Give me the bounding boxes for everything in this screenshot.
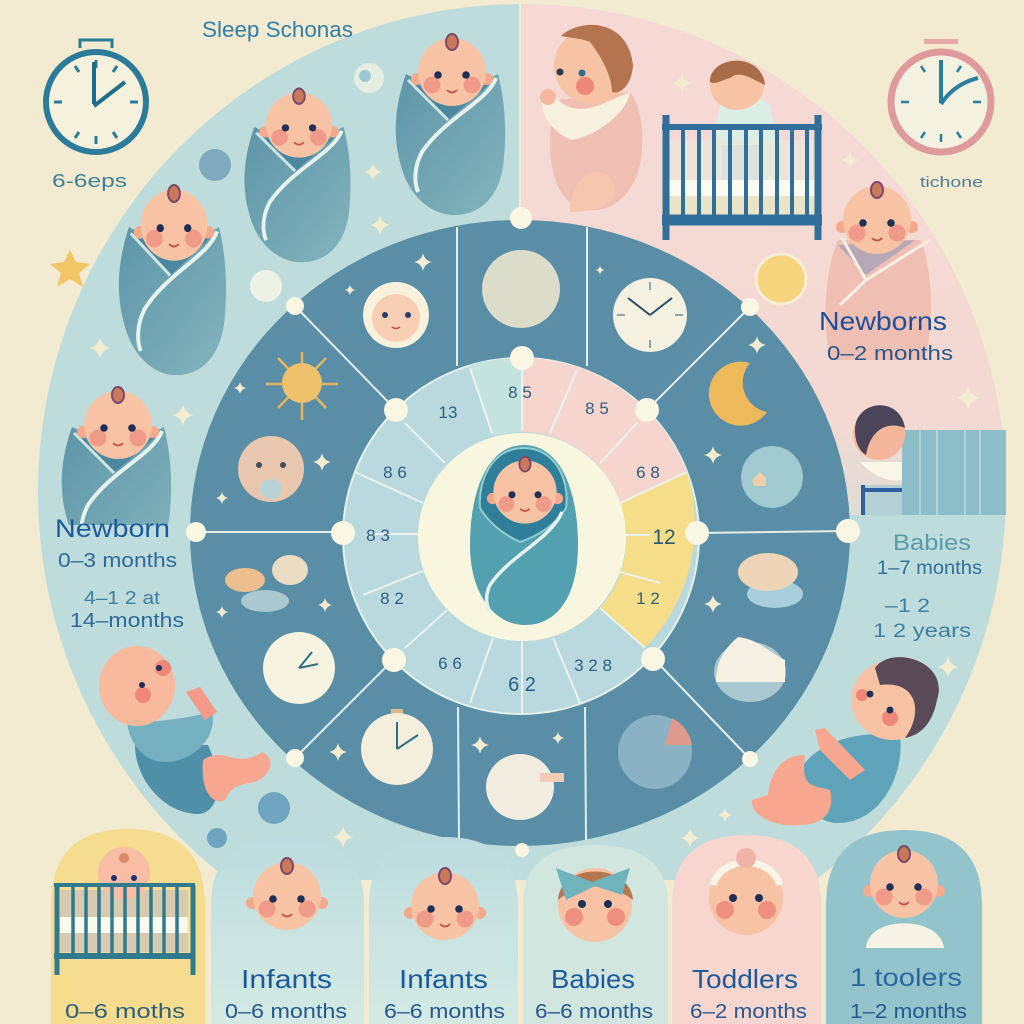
small baby left with cropped wrap xyxy=(62,386,172,525)
hour numbers: 8 6 xyxy=(383,463,407,482)
icon: left bubble xyxy=(199,149,231,181)
label: newborn 0-3 months: 0–3 months xyxy=(58,550,177,572)
icon: yellow night light xyxy=(756,254,806,304)
hour numbers: 1 2 xyxy=(636,589,660,608)
bottom card: infants 6-6 months: Infants xyxy=(399,964,488,994)
hour numbers: 8 3 xyxy=(366,526,390,545)
wheel icon: sleeping shapes left xyxy=(225,555,308,612)
wheel icon: crescent moon xyxy=(709,362,767,426)
bottom card: toddlers 6-2 months: Toddlers xyxy=(692,964,798,994)
bottom card: infants 0-6 months: Infants xyxy=(241,964,332,994)
label under teal clock: 6-6eps xyxy=(52,171,127,191)
label: newborn 0-3 months: 14–months xyxy=(70,610,184,632)
label under pink clock: tichone xyxy=(920,174,983,191)
label: babies and years right: –1 2 xyxy=(885,596,930,617)
wheel icon: sun xyxy=(266,352,338,420)
heading: Sleep Schonas xyxy=(202,17,353,42)
icon: pink clock xyxy=(891,39,991,152)
wheel icon: pillow bottom xyxy=(486,754,564,820)
hour numbers: 12 xyxy=(652,526,676,549)
bottom card: babies 6-6 months: 6–6 months xyxy=(535,1001,653,1023)
wheel icon: cloud right xyxy=(714,637,786,702)
icon: small rattle xyxy=(250,270,282,302)
crib with standing baby xyxy=(662,60,822,240)
icon: top bubble xyxy=(354,63,384,93)
icon: swaddled babies left arc xyxy=(119,34,505,375)
hour numbers: 8 5 xyxy=(585,399,609,418)
bottom card: infants 6-6 months: 6–6 months xyxy=(384,1001,505,1023)
wheel icon: pale planet xyxy=(741,446,803,508)
bottom card: babies 6-6 months xyxy=(523,845,668,1024)
label: babies and years right: 1 2 years xyxy=(873,621,971,642)
panel backing behind bottom cards xyxy=(205,880,830,1024)
icon: teal clock xyxy=(46,40,146,152)
hour numbers: 6 2 xyxy=(508,674,536,696)
label: babies and years right: 1–7 months xyxy=(877,558,982,579)
center circle with swaddled baby xyxy=(418,433,626,641)
bottom card: toddlers 6-2 months: 6–2 months xyxy=(690,1001,807,1023)
bottom card: toddlers 1-2 months: 1 toolers xyxy=(850,964,962,992)
wheel icon: pale moon disc xyxy=(482,250,560,328)
chart: inner hour ring xyxy=(343,358,699,714)
label: newborns 0-2 months: 0–2 months xyxy=(827,343,953,365)
label: newborn 0-3 months: 4–1 2 at xyxy=(84,588,160,608)
wheel icon: clock bottom left xyxy=(361,709,433,785)
bottom card: babies 6-6 months: Babies xyxy=(551,964,635,994)
label: babies and years right xyxy=(873,530,982,642)
hour numbers: 8 2 xyxy=(380,589,404,608)
label: babies and years right: Babies xyxy=(893,530,971,555)
wheel icon: clock left xyxy=(263,632,335,704)
chart: dark outer wheel xyxy=(190,220,850,846)
wheel icon: sleeping shape right xyxy=(738,553,803,608)
bottom card: toddlers 6-2 months xyxy=(672,835,821,1024)
label: newborn 0-3 months xyxy=(55,515,184,632)
bottom card: infants 0-6 months xyxy=(211,837,364,1024)
hour numbers xyxy=(366,383,676,696)
baby in pink swaddle top right xyxy=(540,25,642,212)
label: newborn 0-3 months: Newborn xyxy=(55,515,170,543)
icon: small bow xyxy=(207,828,227,848)
mini crib with baby right xyxy=(853,405,1006,515)
icon: small ball xyxy=(258,792,290,824)
pink swaddled baby right xyxy=(826,182,931,360)
baby lying right xyxy=(752,657,939,825)
wheel icon: clock top right xyxy=(613,278,687,352)
connector nodes xyxy=(186,207,860,857)
icon: star left xyxy=(50,250,90,287)
stars on wheel xyxy=(216,253,766,761)
hour numbers: 8 5 xyxy=(508,383,532,402)
bottom card: toddlers 1-2 months xyxy=(826,830,982,1024)
hour numbers: 13 xyxy=(439,403,457,422)
bottom card: infants 6-6 months xyxy=(369,837,518,1024)
label: newborns 0-2 months: Newborns xyxy=(819,306,947,336)
decorative stars on outer circle xyxy=(89,73,981,848)
hour numbers: 6 6 xyxy=(438,654,462,673)
wheel icon: baby face top xyxy=(363,282,429,348)
bottom card: toddlers 1-2 months: 1–2 months xyxy=(850,1001,967,1023)
bottom card: crib 0-6 months: 0–6 moths xyxy=(65,1001,185,1023)
baby lying left xyxy=(99,646,270,814)
hour numbers: 6 8 xyxy=(636,463,660,482)
hour numbers: 3 2 8 xyxy=(574,656,612,675)
bottom card: infants 0-6 months: 0–6 months xyxy=(225,1001,347,1023)
wheel icon: segmented disc xyxy=(618,715,692,789)
bottom card: crib 0-6 months xyxy=(51,829,205,1024)
label: newborns 0-2 months xyxy=(819,306,953,365)
wheel icon: baby face left xyxy=(238,436,304,502)
